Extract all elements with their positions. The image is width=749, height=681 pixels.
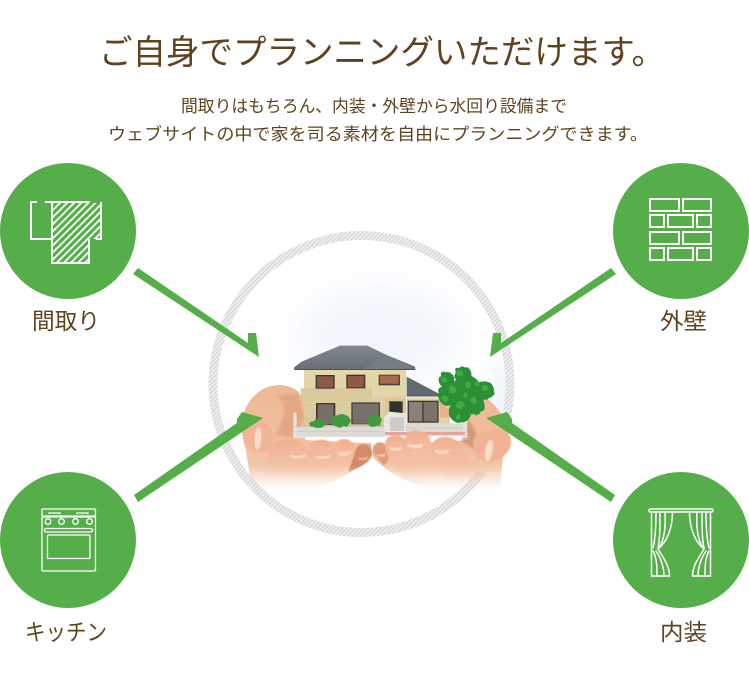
windows	[316, 375, 335, 389]
center ring	[213, 236, 510, 532]
panel: interior	[613, 472, 749, 645]
panel: floor plan	[0, 163, 136, 334]
right fingers	[372, 430, 512, 475]
roof	[294, 346, 415, 370]
label: キッチン	[25, 619, 107, 645]
icon: bricks	[650, 199, 711, 260]
photo: house on hands	[242, 346, 511, 490]
platform	[293, 436, 467, 439]
garden wall	[293, 427, 385, 437]
label: 内装	[660, 619, 707, 645]
label: 外壁	[660, 308, 707, 334]
arrow: bottom left	[134, 412, 263, 502]
sky background inside ring	[308, 294, 506, 414]
icon: oven	[42, 509, 96, 571]
intro text: 間取りはもちろん、内装・外壁から水回り設備まで	[181, 97, 567, 116]
title: ご自身でプランニングいただけます。	[99, 34, 665, 72]
right wing	[407, 377, 439, 397]
intro text	[108, 97, 648, 144]
label: 間取り	[32, 308, 100, 334]
icon: curtains	[649, 509, 713, 576]
fingers	[242, 422, 512, 475]
panel: exterior wall	[613, 163, 749, 334]
house model	[293, 346, 494, 438]
arrow: top right	[490, 268, 616, 357]
shrubs	[309, 414, 381, 428]
walls	[304, 369, 406, 429]
arrow: top left	[133, 268, 259, 357]
tree	[438, 366, 494, 423]
icon: floor plan	[31, 202, 101, 263]
intro text: ウェブサイトの中で家を司る素材を自由にプランニングできます。	[108, 124, 648, 144]
panel: kitchen	[0, 472, 136, 645]
arrow: bottom right	[486, 412, 615, 502]
hand bases	[242, 385, 508, 490]
left fingers	[242, 422, 373, 475]
